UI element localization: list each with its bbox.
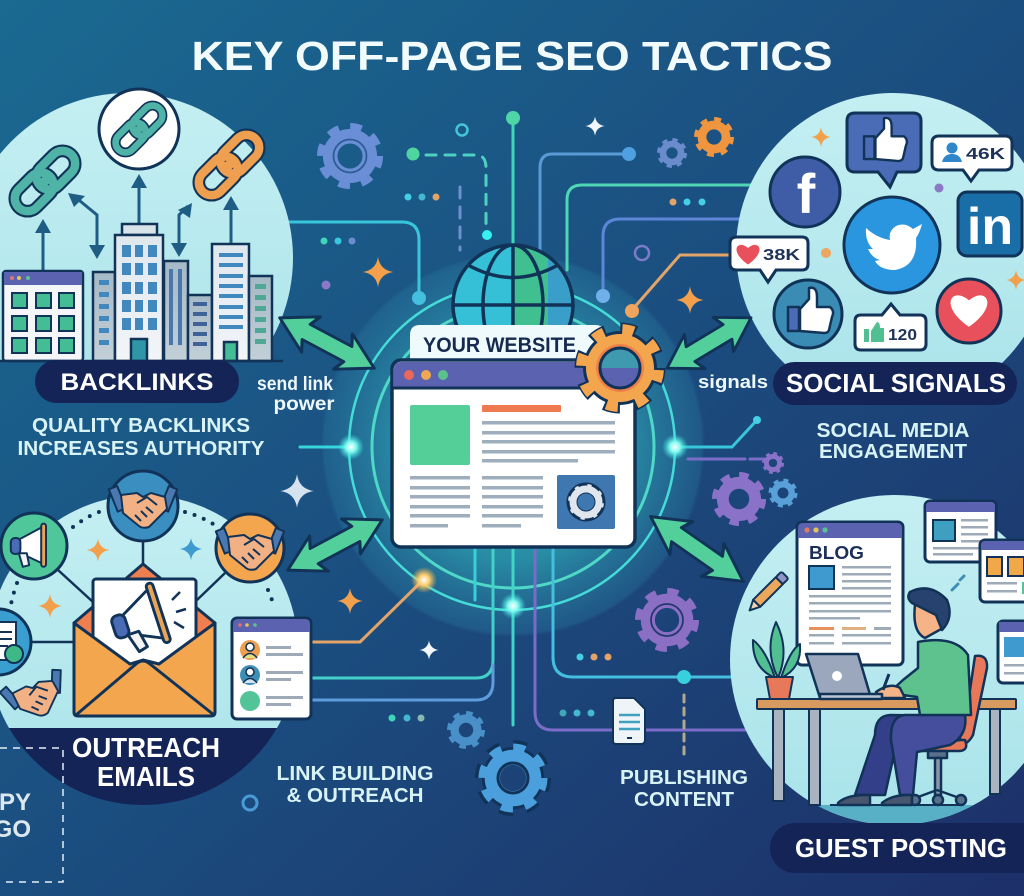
- blog page: [797, 522, 903, 665]
- social signals label pill: [773, 362, 1017, 405]
- icon: document: [613, 698, 645, 744]
- hub connectors and dotted arcs: [10, 510, 275, 642]
- social accents: [811, 127, 1024, 290]
- label: send link power: power: [274, 394, 335, 415]
- icon: thumbs up circle: [774, 280, 842, 348]
- outreach emails label: [72, 732, 220, 792]
- city buildings: [93, 224, 272, 361]
- guest posting label pill: [770, 823, 1024, 873]
- browser window with green tiles: [3, 271, 83, 361]
- outreach stars: [38, 538, 202, 618]
- panel: social signals: [730, 93, 1024, 463]
- person at laptop: [838, 588, 971, 805]
- social signals label pill: SOCIAL SIGNALS: [786, 368, 1006, 398]
- callout: 46K followers: [932, 136, 1012, 181]
- backlinks description: [18, 415, 265, 460]
- arrow: outreach to website: [278, 502, 392, 588]
- arrow: social signals to website: [657, 301, 761, 385]
- social description: ENGAGEMENT: [819, 441, 967, 463]
- social description: [816, 420, 970, 463]
- sparkle stars: [280, 116, 704, 660]
- callout: 120 likes: [855, 304, 926, 350]
- contact list card: [232, 618, 311, 719]
- icon: linkedin: [958, 192, 1022, 256]
- blog page: BLOG: [809, 543, 864, 563]
- callout: 120 likes: 120: [888, 327, 917, 344]
- backlinks description: INCREASES AUTHORITY: [18, 438, 265, 460]
- label: link building and outreach: [276, 763, 434, 807]
- icon: heart circle: [937, 279, 1001, 343]
- label: link building and outreach: LINK BUILDING: [276, 763, 434, 785]
- panel: outreach emails: [0, 471, 311, 805]
- icon: pencil: [746, 571, 789, 614]
- icon: megaphone in green circle: [1, 513, 67, 579]
- panel: guest posting: [730, 495, 1024, 873]
- outreach emails label: OUTREACH: [72, 732, 220, 763]
- your website tab: YOUR WEBSITE: [423, 334, 576, 357]
- guest posting disc: [730, 495, 1024, 825]
- social disc: [736, 93, 1024, 364]
- icon: facebook: [770, 157, 840, 227]
- small site window 3: [998, 621, 1024, 683]
- ground band: [818, 805, 974, 823]
- label: publishing content: CONTENT: [634, 789, 734, 811]
- page heading bar: [482, 405, 561, 412]
- page text lines: [410, 421, 615, 528]
- browser window: [392, 360, 635, 547]
- label: send link power: send link: [257, 374, 333, 395]
- icon: orange chain right: [194, 130, 264, 200]
- backlinks label pill: [35, 360, 239, 403]
- icon: open envelope with megaphone letter: [74, 564, 215, 716]
- desk: [757, 699, 1016, 805]
- outreach disc: [0, 499, 294, 728]
- icon: handshake top: [108, 471, 178, 541]
- small site window 2: [980, 540, 1024, 602]
- label: link building and outreach: & OUTREACH: [286, 785, 424, 807]
- icon: clipboard in blue circle: [0, 609, 31, 675]
- callout: 46K followers: 46K: [966, 146, 1006, 163]
- your website tab: [410, 325, 605, 362]
- circuit lines connecting the tactics: [260, 118, 768, 758]
- label: signals: signals: [698, 372, 768, 392]
- logo placeholder: dashed box: [0, 748, 63, 882]
- icon: linkedin: in: [967, 198, 1013, 256]
- icon: small handshake: [0, 667, 73, 727]
- arrow: backlinks to website: [270, 300, 384, 386]
- icon: twitter bird: [844, 197, 940, 293]
- icon: globe: [451, 243, 575, 325]
- callout: 38K likes: 38K: [763, 247, 801, 264]
- title: KEY OFF-PAGE SEO TACTICS: [192, 33, 832, 79]
- laptop: [806, 654, 882, 699]
- small blue squiggle: [952, 576, 964, 590]
- backlinks disc: [0, 93, 293, 360]
- icon: teal chain left: [10, 146, 80, 216]
- backlinks description: QUALITY BACKLINKS: [32, 415, 250, 437]
- guest posting label pill: GUEST POSTING: [795, 833, 1007, 863]
- icon: potted plant: [753, 622, 800, 699]
- outreach emails label: EMAILS: [97, 761, 195, 792]
- arrow: guest posting to website: [639, 500, 755, 598]
- icon: large orange gear: [583, 331, 657, 405]
- backlinks label pill: BACKLINKS: [60, 369, 214, 396]
- callout: 38K likes: [730, 237, 808, 282]
- icon: chain in white circle: [99, 89, 179, 169]
- panel: backlinks: [0, 89, 293, 460]
- central glow with concentric rings: [321, 253, 705, 637]
- label: send link power: [257, 374, 335, 415]
- central website hub: [392, 245, 657, 547]
- icon: thumbs up speech bubble: [847, 113, 921, 187]
- gears scattered in the background: [322, 120, 795, 810]
- social description: SOCIAL MEDIA: [816, 420, 970, 442]
- label: publishing content: PUBLISHING: [620, 767, 748, 789]
- label: publishing content: [620, 767, 748, 811]
- arrows rising from buildings: [35, 174, 239, 272]
- icon: facebook: f: [797, 162, 816, 225]
- settings tile: [557, 475, 615, 529]
- page image block: [410, 405, 470, 465]
- chair: [910, 656, 987, 805]
- decorative network nodes and dots: [243, 111, 761, 810]
- small site window 1: [925, 501, 996, 562]
- outreach dark label segment: [9, 728, 277, 805]
- icon: handshake in orange circle: [216, 514, 284, 582]
